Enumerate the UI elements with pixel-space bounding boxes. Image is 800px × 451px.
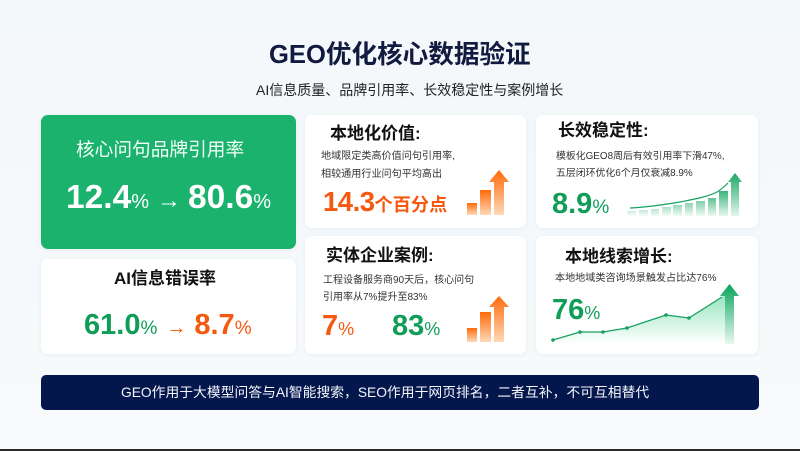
panel heading: long-term stability: 长效稳定性:	[558, 121, 649, 140]
metric: 8.9%: 8.9%	[552, 188, 609, 220]
panel: long-term stability	[536, 115, 758, 228]
chart: lead growth area line	[551, 284, 739, 344]
chart: stability bars and trend line	[627, 173, 742, 216]
panel heading: local lead growth: 本地线索增长:	[565, 247, 673, 266]
metric: 61.0% to 8.7%: 61.0% → 8.7%	[84, 309, 252, 341]
metric: 14.3 percentage points: 14.3个百分点	[323, 186, 447, 217]
panel: localization value	[305, 115, 526, 228]
description: enterprise case: 工程设备服务商90天后，核心问句	[323, 275, 474, 286]
panel: brand citation rate	[41, 115, 296, 249]
description: long-term stability	[556, 150, 724, 179]
panel: local lead growth	[536, 236, 758, 354]
description: localization value: 地域限定类高价值问句引用率,	[321, 151, 455, 162]
description: localization value: 相较通用行业问句平均高出	[321, 169, 442, 180]
panel heading: AI error rate: AI信息错误率	[114, 269, 216, 288]
icon: orange bars and arrow	[467, 170, 509, 215]
description: enterprise case: 引用率从7%提升至83%	[323, 292, 427, 302]
title: GEO优化核心数据验证	[269, 41, 531, 69]
footer text: GEO作用于大模型问答与AI智能搜索，SEO作用于网页排名，二者互补，不可互相替代	[121, 385, 649, 400]
description: enterprise case	[323, 274, 474, 302]
footer banner	[41, 375, 759, 410]
panel heading: enterprise case: 实体企业案例:	[326, 246, 434, 265]
metric: 76%: 76%	[552, 294, 600, 326]
metric: 83%: 83%	[392, 310, 440, 342]
metric: 12.4% to 80.6%: 12.4% →80.6%	[66, 179, 271, 216]
description: local lead growth: 本地地域类咨询场景触发占比达76%	[555, 273, 717, 284]
panel heading: localization value: 本地化价值:	[330, 124, 421, 143]
metric: 7%: 7%	[322, 310, 354, 342]
description: long-term stability: 模板化GEO8周后有效引用率下滑47%,	[556, 151, 724, 162]
panel: AI error rate	[41, 259, 296, 354]
panel: enterprise case	[305, 236, 526, 354]
description: localization value	[321, 150, 455, 180]
description: long-term stability: 五层闭环优化6个月仅衰减8.9%	[556, 168, 693, 179]
icon: orange bars and arrow	[467, 296, 509, 342]
subtitle: AI信息质量、品牌引用率、长效稳定性与案例增长	[256, 82, 563, 98]
panel heading: brand citation rate: 核心问句品牌引用率	[76, 139, 244, 160]
